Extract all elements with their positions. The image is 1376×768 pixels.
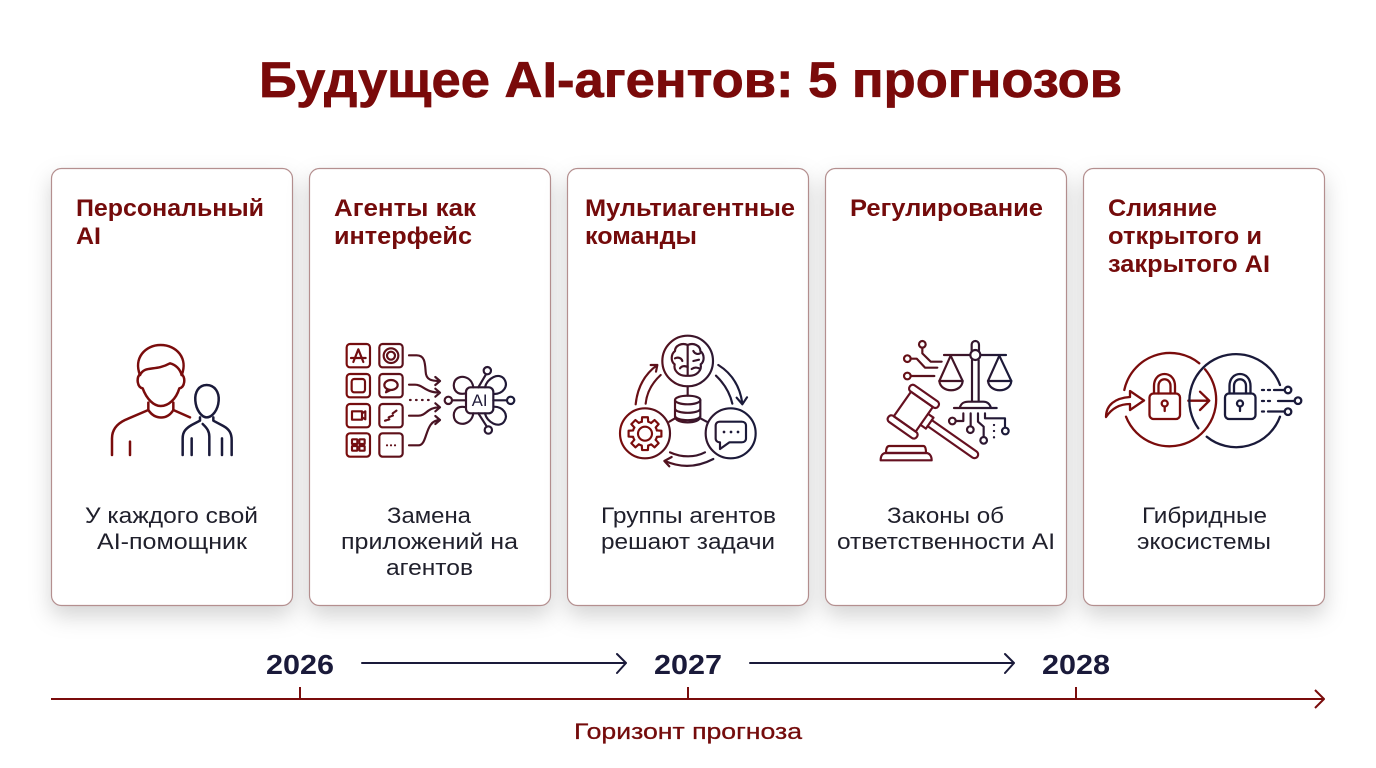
icon: apps to AI: AI xyxy=(472,391,488,410)
heading: Мультиагентные команды: команды xyxy=(585,223,697,250)
heading: Слияние открытого и закрытого AI: Слияние xyxy=(1108,195,1217,222)
description xyxy=(837,503,1055,554)
icon: merging locks xyxy=(1106,353,1301,447)
icon: scales and gavel xyxy=(881,341,1011,475)
panel: Слияние открытого и закрытого AI xyxy=(1084,168,1324,606)
description: экосистемы xyxy=(1137,529,1271,554)
heading: Регулирование: Регулирование xyxy=(850,195,1043,222)
panel: Агенты как интерфейс xyxy=(310,168,550,606)
icon: two people xyxy=(112,345,232,455)
icon: agent cycle xyxy=(620,336,756,466)
panel: Регулирование xyxy=(826,168,1066,606)
description xyxy=(1137,503,1271,554)
heading: Агенты как интерфейс: Агенты как xyxy=(334,195,477,222)
heading: Персональный AI xyxy=(76,195,264,250)
arrow: 2027 to 2028 xyxy=(750,654,1014,673)
axis arrow xyxy=(51,687,1324,708)
arrow: 2026 to 2027 xyxy=(362,654,626,673)
heading: Слияние открытого и закрытого AI: закрытого AI xyxy=(1108,251,1270,278)
description: агентов xyxy=(386,555,473,580)
icon: apps to AI xyxy=(347,344,514,457)
year 2026: 2026 xyxy=(266,649,334,680)
heading: Агенты как интерфейс: интерфейс xyxy=(334,223,472,250)
heading: Персональный AI: Персональный xyxy=(76,195,264,222)
year 2027: 2027 xyxy=(654,649,722,680)
description xyxy=(601,503,776,554)
heading: Агенты как интерфейс xyxy=(334,195,477,250)
year 2028: 2028 xyxy=(1042,649,1110,680)
heading: Мультиагентные команды xyxy=(585,195,795,250)
description: У каждого свой xyxy=(85,503,258,528)
heading: Слияние открытого и закрытого AI xyxy=(1108,195,1270,278)
axis label: Горизонт прогноза xyxy=(574,719,803,744)
description: Законы об xyxy=(887,503,1004,528)
title: Будущее AI-агентов: 5 прогнозов xyxy=(259,52,1122,108)
panel: Персональный AI xyxy=(52,168,292,606)
description: Замена xyxy=(387,503,472,528)
description: AI-помощник xyxy=(97,529,247,554)
description: Группы агентов xyxy=(601,503,776,528)
description: решают задачи xyxy=(601,529,775,554)
heading: Персональный AI: AI xyxy=(76,223,101,250)
description: Гибридные xyxy=(1142,503,1267,528)
description: приложений на xyxy=(341,529,519,554)
timeline xyxy=(51,649,1324,744)
panel: Мультиагентные команды xyxy=(568,168,808,606)
description: ответственности AI xyxy=(837,529,1055,554)
heading: Слияние открытого и закрытого AI: открытого и xyxy=(1108,223,1262,250)
description xyxy=(341,503,519,580)
description xyxy=(85,503,258,554)
heading: Мультиагентные команды: Мультиагентные xyxy=(585,195,795,222)
